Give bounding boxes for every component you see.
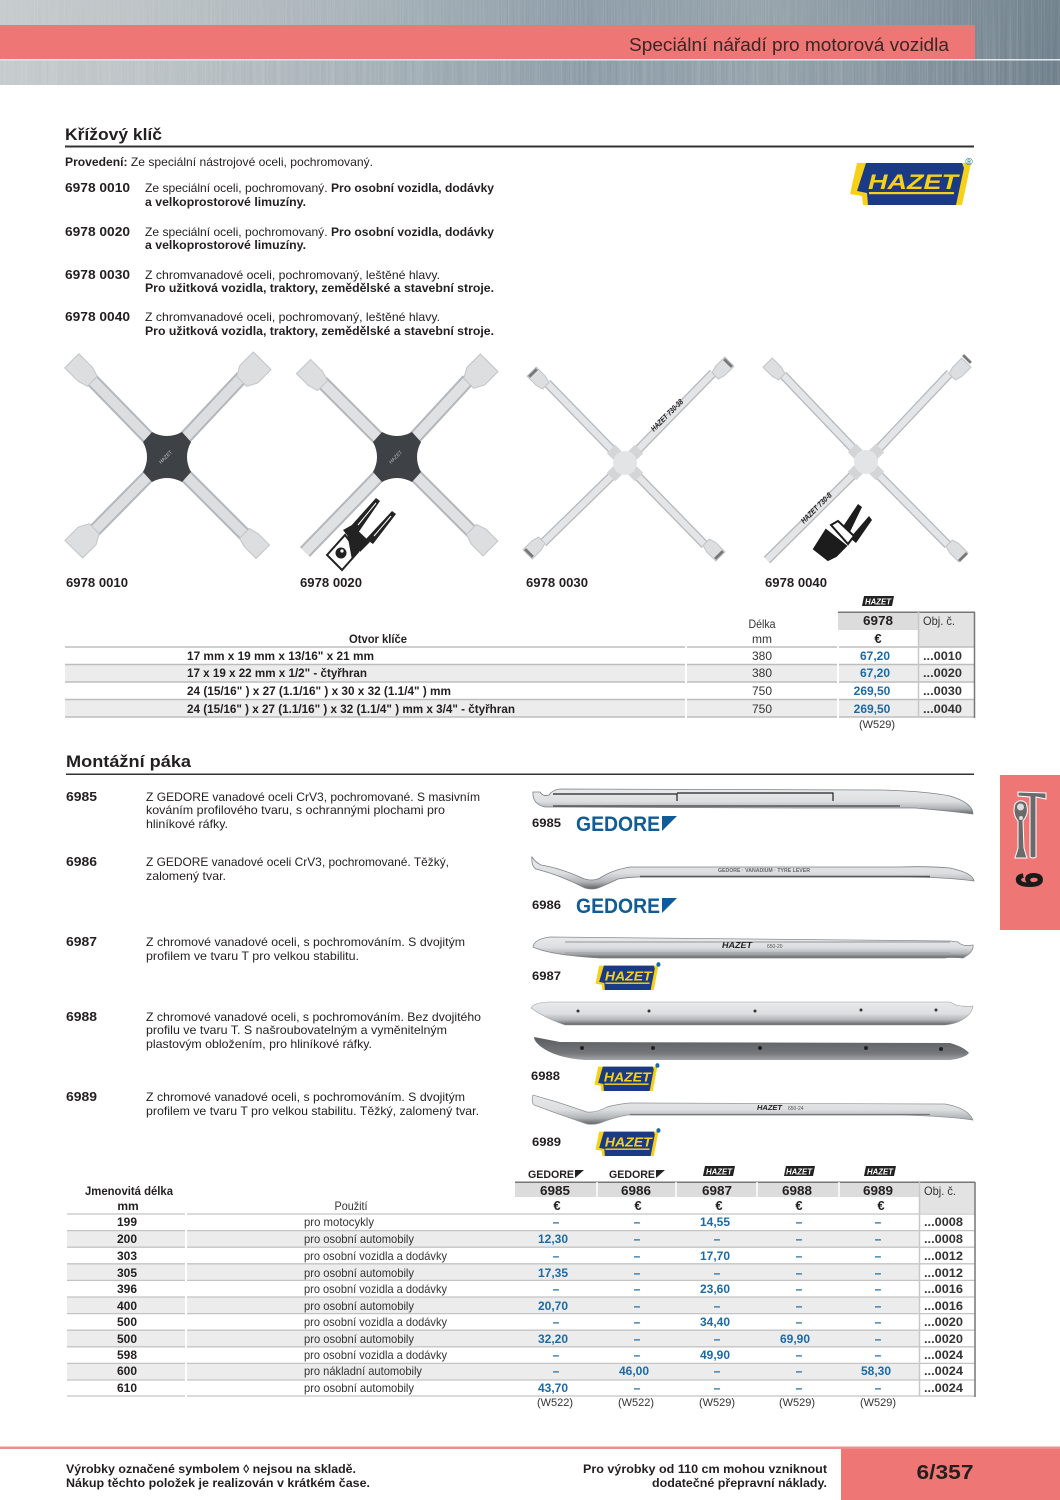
table: tyre lever prices: 6986 — [621, 1183, 651, 1198]
row: 600: – — [796, 1364, 803, 1378]
text block: product descriptions 6985-6989 — [66, 789, 481, 1118]
table: cross wrench prices: Délka — [748, 617, 776, 631]
table: tyre lever prices: 6988 — [782, 1183, 812, 1198]
icon: square drive adapter 0020 — [327, 498, 396, 570]
illustration: cross wrench 6978 0040 — [763, 358, 971, 562]
row: 200: – — [796, 1232, 803, 1246]
row: 396: pro osobní vozidla a dodávky — [304, 1282, 447, 1296]
row: 305: 17,35 — [538, 1266, 568, 1280]
footer note: shipping: dodatečné přepravní náklady. — [652, 1476, 827, 1490]
table: tyre lever prices: € — [553, 1198, 561, 1213]
illustration: tyre lever 6987: 650-20 — [767, 944, 783, 950]
table footnotes: (W522) — [537, 1397, 573, 1409]
brand row: logos: GEDORE — [609, 1169, 655, 1181]
row: 600: 46,00 — [619, 1364, 649, 1378]
row: 598: – — [875, 1348, 882, 1362]
illustration: tyre lever 6987: HAZET — [722, 941, 753, 950]
row: 500 vozidla: 34,40 — [700, 1315, 730, 1329]
row: 396: 396 — [117, 1282, 137, 1296]
row: 500 vozidla — [117, 1315, 963, 1329]
illustration: tyre lever 6988 top view — [531, 1002, 973, 1025]
table: tyre lever prices: € — [877, 1198, 885, 1213]
row: 303: pro osobní vozidla a dodávky — [304, 1249, 447, 1263]
table: cross wrench prices: Otvor klíče — [349, 632, 407, 646]
row: 500 automobily: 69,90 — [780, 1332, 810, 1346]
row: 0030: 24 (15/16" ) x 27 (1.1/16" ) x 30 x 32 (1.1/4" ) mm — [187, 684, 451, 698]
illustration: tyre lever 6986: GEDORE · VANADIUM · TYRE LEVER — [718, 868, 810, 874]
row: 200: pro osobní automobily — [304, 1232, 414, 1246]
row: 610: pro osobní automobily — [304, 1381, 414, 1395]
text block: product descriptions 6978: Pro užitková vozidla, traktory, zemědělské a stavební stroje. — [145, 324, 494, 338]
row: 400: – — [714, 1299, 721, 1313]
table: tyre lever prices: Použití — [334, 1199, 368, 1213]
text block: product descriptions 6978: a velkoprostorové limuzíny. — [145, 238, 306, 252]
row: 303: – — [553, 1249, 560, 1263]
table: tyre lever prices: 6987 — [702, 1183, 732, 1198]
row: 199 — [117, 1215, 963, 1229]
row: 500 automobily — [117, 1332, 963, 1346]
wrench marking 730-38: HAZET 730-38 — [649, 397, 685, 433]
row: 500 automobily: ...0020 — [924, 1332, 963, 1346]
row: 400 — [117, 1299, 963, 1313]
table footnotes: (W529) — [860, 1397, 896, 1409]
row: 303: – — [796, 1249, 803, 1263]
row: 396: ...0016 — [924, 1282, 963, 1296]
row: 199: – — [634, 1215, 641, 1229]
footer note: stock — [66, 1462, 370, 1490]
table: tyre lever prices: Jmenovitá délka — [85, 1184, 173, 1198]
row: 200 — [117, 1232, 963, 1246]
row: 200: 12,30 — [538, 1232, 568, 1246]
illustration: tyre lever 6986 — [532, 857, 974, 889]
text block: product descriptions 6978: Z chromvanadové oceli, pochromovaný, leštěné hlavy. — [145, 268, 440, 282]
logo: HAZET 6989: HAZET — [605, 1135, 654, 1150]
row: 400: – — [634, 1299, 641, 1313]
row: 396: 23,60 — [700, 1282, 730, 1296]
row: 0010: 17 mm x 19 mm x 13/16" x 21 mm — [187, 649, 374, 663]
table: tyre lever prices: 6989 — [863, 1183, 893, 1198]
row: 500 automobily: 500 — [117, 1332, 137, 1346]
row: 303: – — [875, 1249, 882, 1263]
footer — [0, 1446, 1060, 1500]
brand row: logos: HAZET — [867, 1168, 894, 1176]
row: 305: – — [796, 1266, 803, 1280]
text block: product descriptions 6985-6989: profilem ve tvaru T pro velkou stabilitu. Těžký, zalomený tvar. — [146, 1104, 479, 1118]
text block: product descriptions 6978: 6978 0010 — [65, 180, 130, 195]
row: 500 vozidla: 500 — [117, 1315, 137, 1329]
row: 305: – — [714, 1266, 721, 1280]
text block: product descriptions 6985-6989: Z chromové vanadové oceli, s pochromováním. S dvojitým — [146, 1090, 465, 1104]
row: 598: – — [796, 1348, 803, 1362]
row: 0040: 750 — [752, 702, 772, 716]
row: 0030: 269,50 — [854, 684, 891, 698]
row: 610 — [117, 1381, 963, 1395]
side tab: chapter 6 — [1000, 775, 1060, 930]
illustration: tyre lever 6989: 650-24 — [788, 1106, 804, 1112]
text block: product descriptions 6985-6989: zalomený tvar. — [146, 869, 226, 883]
icon: hammer and ratchet — [1014, 792, 1046, 858]
text block: product descriptions 6985-6989: 6987 — [66, 934, 97, 949]
row: 500 automobily: 32,20 — [538, 1332, 568, 1346]
text block: product descriptions 6978: Ze speciální oceli, pochromovaný. Pro osobní vozidla, dodávky — [145, 181, 494, 195]
label: 6987: 6987 — [532, 969, 561, 983]
label and logo: 6985 GEDORE: 6985 — [532, 816, 561, 830]
row: 0010: 67,20 — [860, 649, 890, 663]
row: 303: 303 — [117, 1249, 137, 1263]
row: 500 vozidla: – — [875, 1315, 882, 1329]
row: 200: – — [714, 1232, 721, 1246]
row: 600: 600 — [117, 1364, 137, 1378]
row: 400: 400 — [117, 1299, 137, 1313]
text block: product descriptions 6978 — [65, 155, 494, 338]
row: 500 automobily: – — [634, 1332, 641, 1346]
illustration: tyre lever 6989 — [532, 1095, 973, 1124]
logo: HAZET 6989 — [596, 1128, 661, 1156]
row: 0040: 269,50 — [854, 702, 891, 716]
row: 500 vozidla: ...0020 — [924, 1315, 963, 1329]
row: 598: – — [634, 1348, 641, 1362]
table footnotes: (W529) — [699, 1397, 735, 1409]
row: 400: 20,70 — [538, 1299, 568, 1313]
illustration: tyre lever 6985 — [533, 789, 973, 814]
captions under wrenches: 6978 0030 — [526, 575, 588, 590]
text block: product descriptions 6985-6989: plastovým obložením, pro hliníkové ráfky. — [146, 1037, 372, 1051]
text block: product descriptions 6978: 6978 0040 — [65, 309, 130, 324]
illustration: tyre lever 6987 — [533, 937, 973, 958]
text block: product descriptions 6985-6989: hliníkové ráfky. — [146, 817, 228, 831]
row: 598: ...0024 — [924, 1348, 963, 1362]
logo: HAZET large: ® — [965, 157, 973, 168]
captions under wrenches: 6978 0040 — [765, 575, 827, 590]
row: 598: – — [553, 1348, 560, 1362]
table footnotes — [537, 1397, 896, 1409]
row: 199: ...0008 — [924, 1215, 963, 1229]
row: 610: – — [875, 1381, 882, 1395]
logo: HAZET 6987: HAZET — [605, 969, 654, 984]
label and logo: 6985 GEDORE — [532, 813, 677, 836]
row: 610: ...0024 — [924, 1381, 963, 1395]
text block: product descriptions 6985-6989: 6989 — [66, 1089, 97, 1104]
row: 305: ...0012 — [924, 1266, 963, 1280]
row: 400: ...0016 — [924, 1299, 963, 1313]
table: cross wrench prices: 6978 — [863, 613, 893, 628]
logo: HAZET 6988 — [595, 1063, 660, 1091]
row: 396: – — [634, 1282, 641, 1296]
table: tyre lever prices: € — [634, 1198, 642, 1213]
row: 199: pro motocykly — [304, 1215, 374, 1229]
row: 305: – — [634, 1266, 641, 1280]
row: 0010: ...0010 — [923, 649, 962, 663]
row: 500 vozidla: – — [553, 1315, 560, 1329]
text block: product descriptions 6985-6989: Z GEDORE vanadové oceli CrV3, pochromované. S masivním — [146, 790, 480, 804]
row: 400: – — [875, 1299, 882, 1313]
text block: product descriptions 6985-6989: Z GEDORE vanadové oceli CrV3, pochromované. Těžký, — [146, 855, 449, 869]
footer note: shipping: Pro výrobky od 110 cm mohou vzniknout — [583, 1462, 827, 1476]
row: 303: 17,70 — [700, 1249, 730, 1263]
table: tyre lever prices: € — [715, 1198, 723, 1213]
row: 600: 58,30 — [861, 1364, 891, 1378]
row: 0020 — [187, 666, 962, 680]
row: 500 automobily: pro osobní automobily — [304, 1332, 414, 1346]
illustration: cross wrench 6978 0010: HAZET — [158, 450, 174, 465]
row: 303: – — [634, 1249, 641, 1263]
row: 0020: ...0020 — [923, 666, 962, 680]
text block: product descriptions 6985-6989: Z chromové vanadové oceli, s pochromováním. Bez dvojitého — [146, 1010, 481, 1024]
row: 0040: 24 (15/16" ) x 27 (1.1/16" ) x 32 (1.1/4" ) mm x 3/4" - čtyřhran — [187, 702, 515, 716]
label and logo: 6986 GEDORE: 6986 — [532, 898, 561, 912]
row: 199: – — [796, 1215, 803, 1229]
table: tyre lever prices — [67, 1166, 975, 1409]
row: 610: – — [714, 1381, 721, 1395]
section heading: Křížový klíč: Křížový klíč — [65, 125, 162, 144]
row: 610: 43,70 — [538, 1381, 568, 1395]
table: tyre lever prices: € — [795, 1198, 803, 1213]
table footnotes: (W529) — [779, 1397, 815, 1409]
row: 600: ...0024 — [924, 1364, 963, 1378]
row: 500 vozidla: – — [796, 1315, 803, 1329]
label: 6989: 6989 — [532, 1135, 561, 1149]
row: 200: 200 — [117, 1232, 137, 1246]
row: 598: 598 — [117, 1348, 137, 1362]
table: tyre lever prices: mm — [117, 1199, 139, 1213]
row: 598 — [117, 1348, 963, 1362]
row: 305 — [117, 1266, 963, 1280]
illustration: tyre lever 6989: HAZET — [757, 1103, 783, 1112]
row: 0030 — [187, 684, 962, 698]
captions under wrenches: 6978 0020 — [300, 575, 362, 590]
captions under wrenches: 6978 0010 — [66, 575, 128, 590]
text block: product descriptions 6985-6989: 6988 — [66, 1009, 97, 1024]
text block: product descriptions 6978: Pro užitková vozidla, traktory, zemědělské a stavební stroje. — [145, 281, 494, 295]
illustration: cross wrench 6978 0020: HAZET — [388, 450, 404, 465]
logo: HAZET 6988: HAZET — [604, 1070, 653, 1085]
illustration: cross wrench 6978 0030 — [523, 357, 734, 561]
table: tyre lever prices: Obj. č. — [924, 1184, 956, 1198]
row: 500 vozidla: – — [634, 1315, 641, 1329]
brand row: logos: HAZET — [786, 1168, 813, 1176]
footer note: shipping — [583, 1462, 827, 1490]
row: 200: – — [634, 1232, 641, 1246]
text block: product descriptions 6985-6989: 6986 — [66, 854, 97, 869]
table: cross wrench prices: (W529) — [859, 719, 895, 731]
row: 500 automobily: – — [875, 1332, 882, 1346]
header band — [0, 0, 1060, 85]
row: 303 — [117, 1249, 963, 1263]
row: 598: 49,90 — [700, 1348, 730, 1362]
wrench marking 730-8: HAZET 730-8 — [799, 490, 834, 525]
text block: product descriptions 6978: 6978 0030 — [65, 267, 130, 282]
row: 610: 610 — [117, 1381, 137, 1395]
text block: product descriptions 6985-6989: profilem ve tvaru T pro velkou stabilitu. — [146, 949, 359, 963]
label and logo: 6986 GEDORE: GEDORE — [576, 895, 660, 918]
row: 199: – — [553, 1215, 560, 1229]
table footnotes: (W522) — [618, 1397, 654, 1409]
table: cross wrench prices: € — [874, 631, 882, 646]
row: 0020: 380 — [752, 666, 772, 680]
row: 600 — [117, 1364, 963, 1378]
chapter number: 6 — [1009, 872, 1050, 888]
text block: product descriptions 6978: Provedení: Ze speciální nástrojové oceli, pochromovaný. — [65, 155, 373, 169]
section heading: Montážní páka: Montážní páka — [66, 752, 192, 771]
row: 396: – — [796, 1282, 803, 1296]
table: tyre lever prices: 6985 — [540, 1183, 570, 1198]
text block: product descriptions 6978: a velkoprostorové limuzíny. — [145, 195, 306, 209]
row: 396 — [117, 1282, 963, 1296]
small logo: HAZET 6978: HAZET — [865, 598, 892, 606]
table: cross wrench prices: Obj. č. — [923, 614, 955, 628]
page number: 6/357 — [916, 1462, 974, 1484]
logo: HAZET large: HAZET — [868, 171, 961, 194]
text block: product descriptions 6978: 6978 0020 — [65, 224, 130, 239]
row: 500 vozidla: pro osobní vozidla a dodávky — [304, 1315, 447, 1329]
text block: product descriptions 6985-6989: kováním profilového tvaru, s ochrannými plochami pro — [146, 803, 445, 817]
row: 305: pro osobní automobily — [304, 1266, 414, 1280]
row: 0020: 17 x 19 x 22 mm x 1/2" - čtyřhran — [187, 666, 367, 680]
row: 305: – — [875, 1266, 882, 1280]
row: 400: – — [796, 1299, 803, 1313]
table: cross wrench prices: mm — [752, 632, 772, 646]
logo: HAZET large — [850, 157, 973, 205]
row: 199: 14,55 — [700, 1215, 730, 1229]
row: 0040: ...0040 — [923, 702, 962, 716]
row: 0020: 67,20 — [860, 666, 890, 680]
row: 0030: ...0030 — [923, 684, 962, 698]
table: cross wrench prices — [65, 596, 975, 731]
row: 600: – — [553, 1364, 560, 1378]
footer note: stock: Nákup těchto položek je realizován v krátkém čase. — [66, 1476, 370, 1490]
row: 199: – — [875, 1215, 882, 1229]
row: 200: ...0008 — [924, 1232, 963, 1246]
row: 610: – — [634, 1381, 641, 1395]
footer note: stock: Výrobky označené symbolem ◊ nejsou na skladě. — [66, 1462, 356, 1476]
text block: product descriptions 6978: Z chromvanadové oceli, pochromovaný, leštěné hlavy. — [145, 310, 440, 324]
row: 0040 — [187, 702, 962, 716]
text block: product descriptions 6985-6989: Z chromové vanadové oceli, s pochromováním. S dvojitým — [146, 935, 465, 949]
row: 0030: 750 — [752, 684, 772, 698]
row: 396: – — [553, 1282, 560, 1296]
row: 200: – — [875, 1232, 882, 1246]
brand row: logos — [528, 1166, 896, 1181]
illustration: tyre lever 6988 underside — [534, 1037, 969, 1060]
header title: Speciální nářadí pro motorová vozidla — [629, 34, 950, 55]
icon: square drive adapter 0040 — [814, 504, 872, 560]
label: 6988: 6988 — [531, 1069, 560, 1083]
row: 199: 199 — [117, 1215, 137, 1229]
row: 396: – — [875, 1282, 882, 1296]
text block: product descriptions 6978: Ze speciální oceli, pochromovaný. Pro osobní vozidla, dodávky — [145, 225, 494, 239]
row: 303: ...0012 — [924, 1249, 963, 1263]
label and logo: 6985 GEDORE: GEDORE — [576, 813, 660, 836]
brand row: logos: GEDORE — [528, 1169, 574, 1181]
text block: product descriptions 6985-6989: 6985 — [66, 789, 97, 804]
row: 500 automobily: – — [714, 1332, 721, 1346]
row: 598: pro osobní vozidla a dodávky — [304, 1348, 447, 1362]
row: 0010: 380 — [752, 649, 772, 663]
row: 610: – — [796, 1381, 803, 1395]
logo: HAZET 6987 — [596, 962, 661, 990]
row: 600: pro nákladní automobily — [304, 1364, 422, 1378]
illustration: cross wrench 6978 0010 — [65, 352, 271, 558]
row: 0010 — [187, 649, 962, 663]
brand row: logos: HAZET — [706, 1168, 733, 1176]
row: 400: pro osobní automobily — [304, 1299, 414, 1313]
captions under wrenches — [66, 575, 827, 590]
illustration: cross wrench 6978 0020 — [296, 354, 498, 570]
text block: product descriptions 6985-6989: profilu ve tvaru T. S našroubovatelným a vyměnitelným — [146, 1023, 447, 1037]
label and logo: 6986 GEDORE — [532, 895, 677, 918]
row: 305: 305 — [117, 1266, 137, 1280]
row: 600: – — [714, 1364, 721, 1378]
